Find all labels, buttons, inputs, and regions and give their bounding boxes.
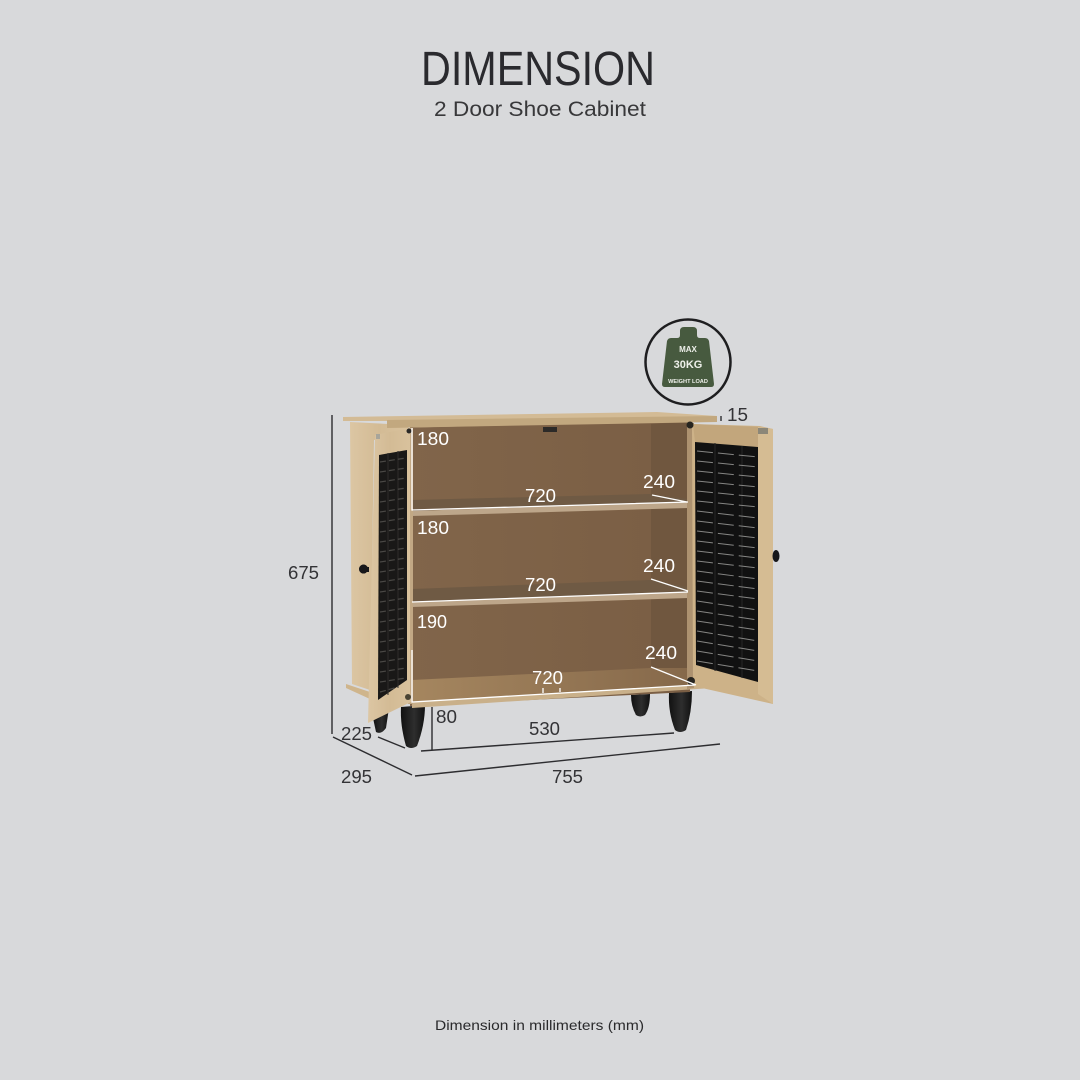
weight label: weight load: WEIGHT LOAD: [668, 379, 708, 385]
dark dimension labels: 295: [341, 767, 372, 787]
cabinet: [343, 412, 780, 748]
white dimension labels: 190: [417, 612, 447, 632]
cabinet top board: [343, 412, 717, 428]
dark dimension labels: 15: [727, 405, 748, 425]
white dimension labels: 240: [643, 556, 675, 576]
subtitle: 2 Door Shoe Cabinet: [434, 98, 646, 121]
white dimension labels: 720: [525, 486, 556, 506]
cabinet left post: [408, 428, 413, 704]
white dimension lines: [412, 428, 696, 702]
dark dimension labels: 225: [341, 724, 372, 744]
right door knob: [772, 550, 780, 562]
cabinet side panel: [350, 422, 408, 690]
dark dimension labels: 530: [529, 719, 560, 739]
white dimension labels: 720: [525, 575, 556, 595]
dark dimension labels: 675: [288, 563, 319, 583]
cabinet right post: [687, 423, 694, 689]
cabinet right inner wall: [651, 422, 690, 690]
white dimension labels: 180: [417, 518, 449, 538]
badge: max weight load: [646, 320, 730, 404]
weight label: 30kg: 30KG: [674, 359, 702, 371]
shelf 2 surface and edge: [412, 580, 688, 602]
dark dimension labels: 755: [552, 767, 583, 787]
dark dimension lines: [332, 415, 721, 776]
white dimension labels: [417, 429, 677, 688]
white dimension labels: 180: [417, 429, 449, 449]
left door knob: [359, 565, 369, 574]
cabinet floor: [412, 668, 695, 703]
cabinet legs: [373, 691, 692, 748]
left door: [368, 428, 412, 723]
shelf 1 surface and edge: [412, 494, 688, 511]
top bracket: [543, 427, 557, 432]
cabinet interior back: [410, 422, 690, 706]
dark dimension labels: 80: [436, 707, 457, 727]
white dimension labels: 240: [643, 472, 675, 492]
footnote: Dimension in millimeters (mm): [435, 1017, 644, 1033]
icon: weight: [662, 327, 714, 387]
weight label: max: MAX: [679, 345, 698, 354]
white dimension labels: 240: [645, 643, 677, 663]
cabinet base front edge: [412, 685, 712, 708]
dark dimension labels: [288, 405, 748, 787]
title: DIMENSION: [421, 43, 655, 96]
right door: [686, 422, 773, 704]
white dimension labels: 720: [532, 668, 563, 688]
